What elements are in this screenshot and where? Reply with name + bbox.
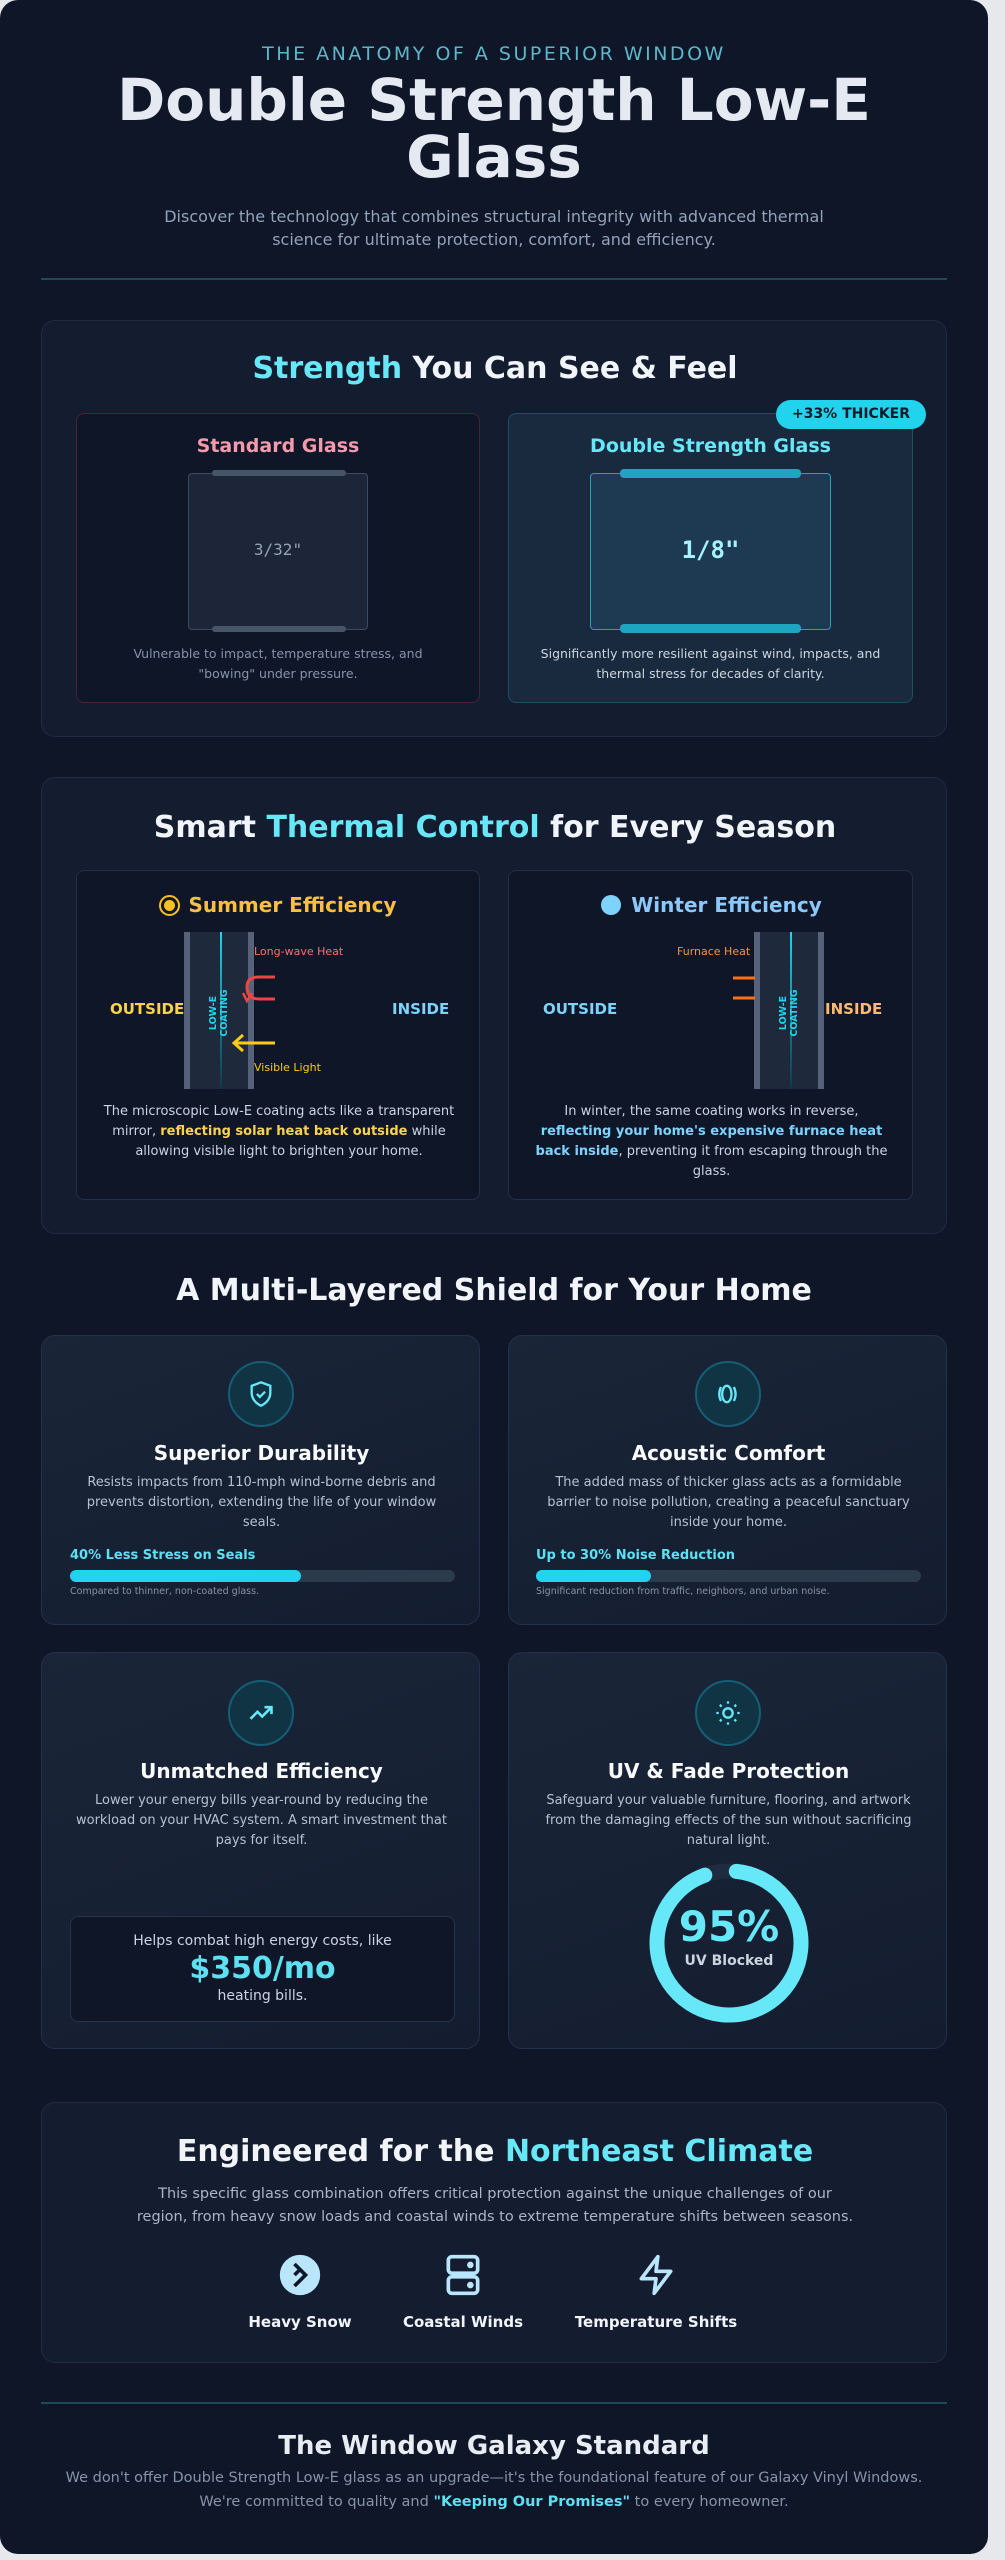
bar: Compared to thinner, non-coated glass. [70,1586,259,1597]
text [137,2186,853,2225]
savings box [70,1916,455,2022]
desc: Lower your energy bills year-round by reducing the workload on your HVAC system. A smart investment that pays for itself. [76,1793,447,1848]
card: standard glass [76,413,480,703]
icon sound [695,1361,761,1427]
savings box: $350/mo [189,1951,336,1986]
arrow: heat reflect [242,976,275,1004]
summer glass: LOW-E [208,996,219,1030]
card: winter [508,870,913,1200]
title: Glass [406,123,582,191]
icon: temperature: Temperature Shifts [575,2313,737,2331]
light label: Visible Light [254,1061,321,1074]
inside label winter: INSIDE [825,1000,882,1018]
heading thermal: Smart Thermal Control for Every Season [154,810,836,845]
furnace dashes [733,976,755,1000]
footer text: We don't offer Double Strength Low-E glass as an upgrade—it's the foundational feature of our Galaxy Vinyl Windows. [66,2470,922,2486]
bar: 40% Less Stress on Seals [70,1548,255,1563]
desc: Safeguard your valuable furniture, flooring, and artwork from the damaging effects of the sun without sacrificing natural light. [545,1793,912,1848]
standard glass pane [188,473,368,630]
title: Acoustic Comfort [632,1441,825,1465]
summer title: Summer Efficiency [188,893,397,917]
standard title: Standard Glass [197,435,359,457]
winter title: Winter Efficiency [631,893,822,917]
icon shield [228,1361,294,1427]
heading: Engineered for the Northeast Climate [177,2134,813,2169]
heat label: Long-wave Heat [254,945,343,958]
subtitle: Discover the technology that combines structural integrity with advanced thermal [164,207,824,226]
title [117,66,871,191]
footer text [66,2470,922,2510]
footer text: We're committed to quality and "Keeping Our Promises" to every homeowner. [199,2494,789,2510]
caption ds: thermal stress for decades of clarity. [596,666,825,681]
icon: winds: Coastal Winds [403,2313,523,2331]
ds pane [590,473,831,630]
furnace label: Furnace Heat [677,945,750,958]
icon sun [695,1680,761,1746]
outside label winter: OUTSIDE [543,1000,617,1018]
text: This specific glass combination offers critical protection against the unique challenges of our [158,2186,832,2202]
label 1/8: 1/8" [682,536,739,564]
card: summer [76,870,480,1200]
ring chart [650,1864,808,2022]
feature card: uv [508,1652,947,2049]
title: Superior Durability [154,1441,369,1465]
heading: shield: A Multi-Layered Shield for Your Home [176,1273,812,1308]
bar: Significant reduction from traffic, neighbors, and urban noise. [536,1586,830,1597]
subtitle: science for ultimate protection, comfort, and efficiency. [272,230,716,249]
caption ds [541,646,880,681]
subtitle [164,207,824,249]
badge: +33% THICKER [792,406,910,422]
summer caption: The microscopic Low-E coating acts like a transparent mirror, reflecting solar heat back outside while allowing visible light to brighten your home. [104,1104,454,1159]
double strength title: Double Strength Glass [590,435,831,457]
badge [776,400,926,429]
card: double strength [508,413,913,703]
winter glass: COATING [789,989,800,1037]
eyebrow: THE ANATOMY OF A SUPERIOR WINDOW [262,43,726,65]
inside label: INSIDE [392,1000,449,1018]
icon: snow [248,2254,352,2331]
desc: The added mass of thicker glass acts as a formidable barrier to noise pollution, creating a peaceful sanctuary inside your home. [547,1475,910,1530]
icon: winds [403,2254,523,2331]
icon trend [228,1680,294,1746]
feature card: efficiency [41,1652,480,2049]
caption standard [133,646,423,681]
heading: strength: Strength You Can See & Feel [252,351,738,386]
summer glass: COATING [219,989,230,1037]
arrow: light [232,1034,275,1052]
panel: strength [41,320,947,737]
icon: temperature [574,2254,737,2331]
footer heading: The Window Galaxy Standard [278,2431,710,2461]
caption standard: Vulnerable to impact, temperature stress, and [133,646,423,661]
bar [536,1548,921,1597]
savings box: Helps combat high energy costs, like [133,1933,392,1949]
caption standard: "bowing" under pressure. [198,666,358,681]
panel: thermal [41,777,947,1234]
caption ds: Significantly more resilient against wind, impacts, and [541,646,880,661]
feature card: durability [41,1335,480,1625]
icon: snow: Heavy Snow [248,2313,352,2331]
panel: northeast [41,2102,947,2363]
feature card: acoustic [508,1335,947,1625]
summer glass [184,932,254,1089]
ring chart: UV Blocked [685,1953,773,1969]
desc: Resists impacts from 110-mph wind-borne debris and prevents distortion, extending the life of your window seals. [87,1475,436,1530]
glass comparison content [133,435,880,681]
winter glass [754,932,824,1089]
bar [70,1548,455,1597]
title: UV & Fade Protection [608,1759,849,1783]
bar: Up to 30% Noise Reduction [536,1548,735,1563]
ring chart: 95% [679,1902,779,1951]
text: region, from heavy snow loads and coastal winds to extreme temperature shifts between seasons. [137,2209,853,2225]
outside label: OUTSIDE [110,1000,184,1018]
label 3/32: 3/32" [254,540,302,559]
winter caption: In winter, the same coating works in reverse, reflecting your home's expensive furnace heat back inside, preventing it from escaping through the glass. [536,1104,887,1179]
title: Unmatched Efficiency [140,1759,383,1783]
title: Double Strength Low-E [117,66,871,134]
winter glass: LOW-E [778,996,789,1030]
savings box: heating bills. [218,1988,307,2004]
